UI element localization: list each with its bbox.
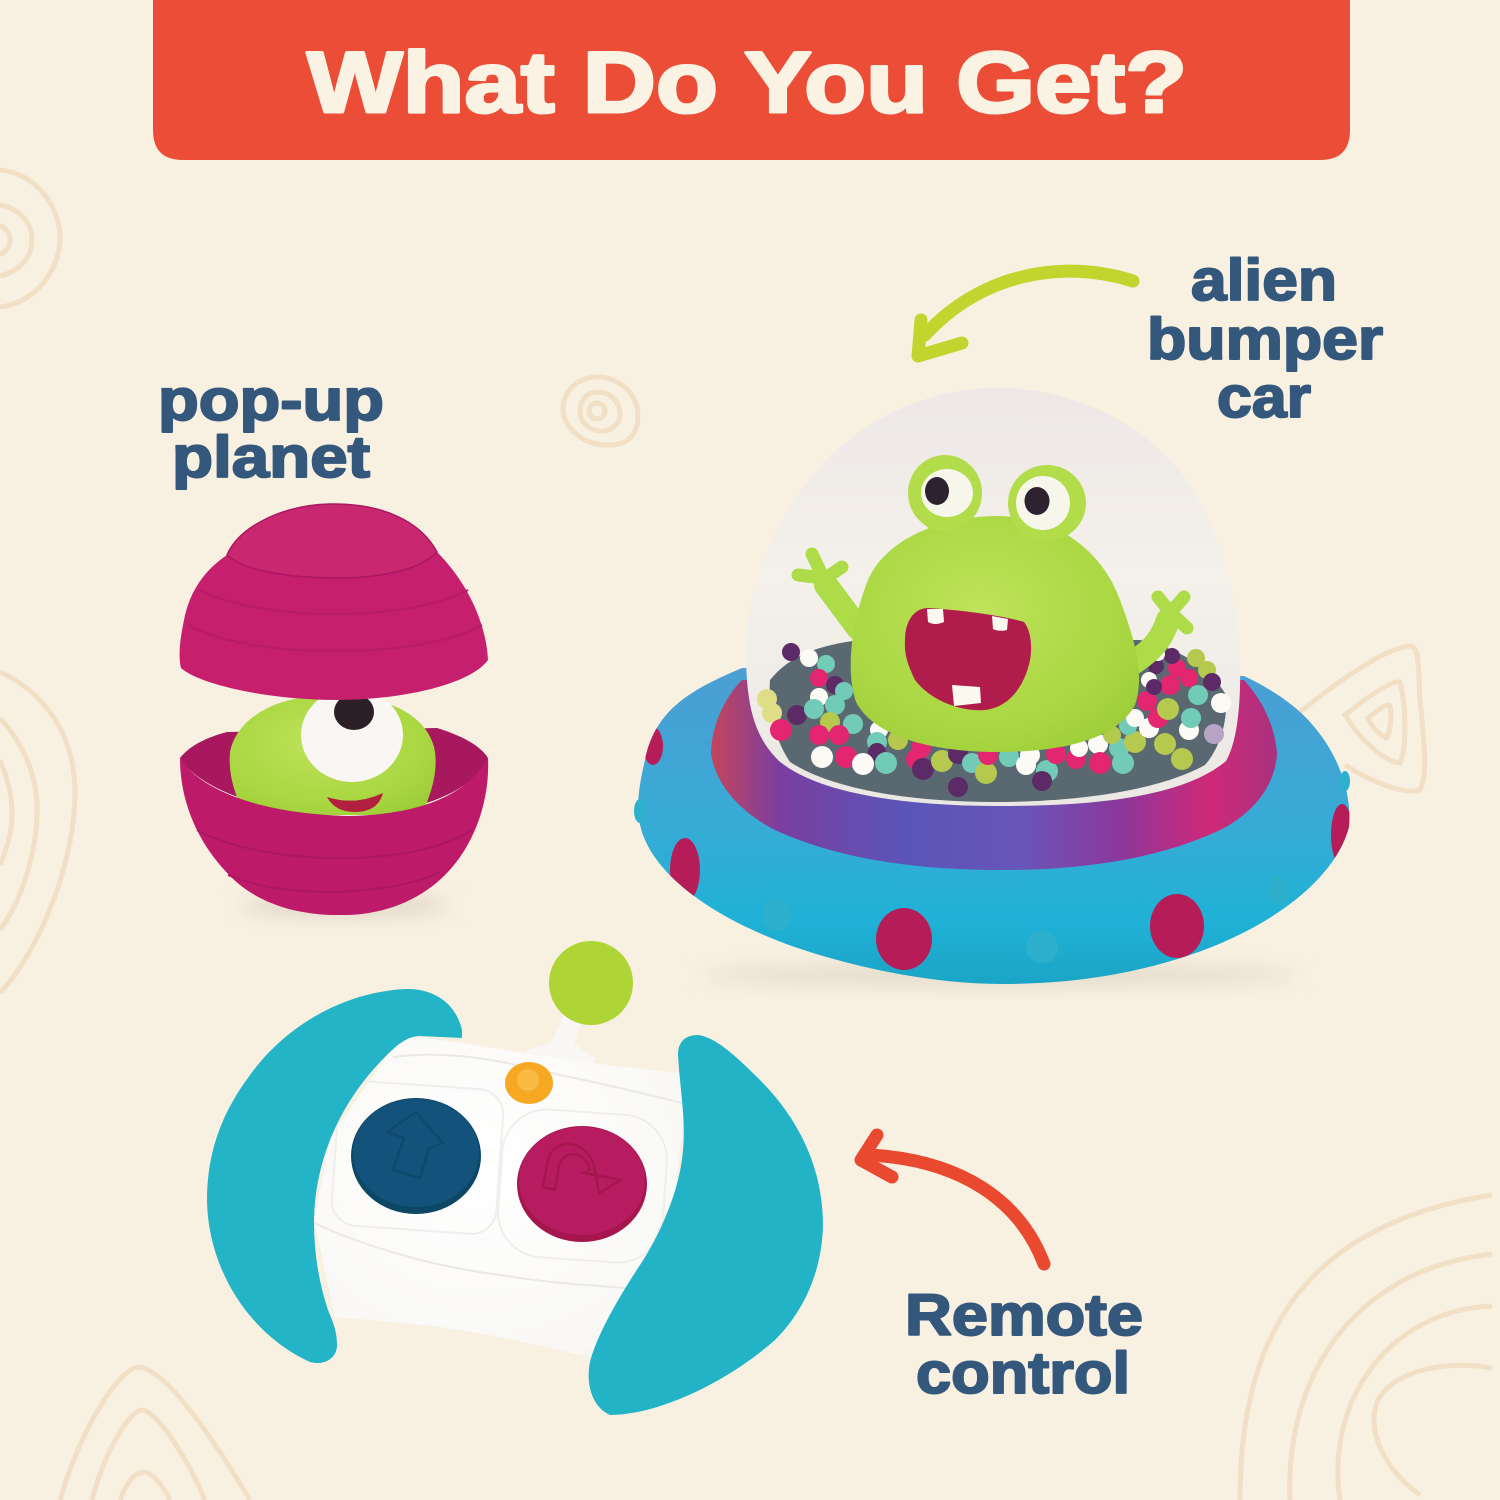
title: What Do You Get? xyxy=(307,35,1187,131)
ufo dark floor xyxy=(770,640,1226,802)
alien body xyxy=(851,516,1139,752)
navy up button xyxy=(351,1098,481,1214)
label: pop-up planet: pop-up xyxy=(158,368,384,433)
header banner xyxy=(153,0,1350,160)
planet shadow xyxy=(240,893,450,917)
alien xyxy=(798,455,1187,752)
planet cap top disc xyxy=(227,504,437,578)
toy: remote control xyxy=(207,941,823,1415)
planet alien eye xyxy=(301,688,403,782)
ufo purple ring xyxy=(711,680,1277,870)
planet green alien xyxy=(230,688,436,815)
toy: pop-up planet xyxy=(180,504,488,917)
remote white body xyxy=(314,1037,684,1358)
remote antenna xyxy=(526,941,633,1065)
planet bottom shell back xyxy=(180,728,488,815)
arrow: lime pointing to bumper car xyxy=(918,271,1133,356)
ufo teal bumps xyxy=(634,771,1350,963)
remote antenna ball xyxy=(549,941,633,1025)
remote left teal grip xyxy=(207,989,462,1363)
remote button frames xyxy=(330,1079,670,1266)
toy: alien bumper car xyxy=(634,388,1353,987)
label: alien bumper car xyxy=(1147,248,1383,430)
ufo base xyxy=(638,668,1349,984)
orange power button xyxy=(505,1062,553,1104)
alien left arm xyxy=(798,554,858,628)
label: Remote control: control xyxy=(916,1341,1130,1406)
planet top cap xyxy=(180,504,488,700)
beads xyxy=(757,643,1231,797)
label: alien bumper car: car xyxy=(1217,365,1311,430)
alien eye stalks xyxy=(925,520,1066,560)
alien mouth xyxy=(905,608,1031,710)
alien upper teeth xyxy=(927,609,1008,631)
label: Remote control: Remote xyxy=(905,1283,1143,1348)
ufo magenta spots xyxy=(643,727,1353,970)
dome xyxy=(746,388,1240,806)
label: Remote control xyxy=(905,1283,1143,1406)
label: alien bumper car: alien xyxy=(1191,248,1337,313)
planet bottom shell front xyxy=(180,758,488,915)
alien right arm xyxy=(1130,597,1187,665)
planet alien mouth xyxy=(327,793,383,812)
label: pop-up planet xyxy=(158,368,384,490)
alien right eye xyxy=(1008,465,1086,541)
label: pop-up planet: planet xyxy=(172,425,370,490)
label: alien bumper car: bumper xyxy=(1147,307,1383,372)
arrow: red pointing to remote xyxy=(861,1135,1044,1264)
planet alien pupil xyxy=(334,694,374,730)
alien lower tooth xyxy=(952,685,981,706)
alien left eye xyxy=(908,455,982,531)
ufo shadow xyxy=(700,963,1300,987)
magenta turn button xyxy=(517,1126,647,1242)
remote right teal grip xyxy=(589,1035,823,1415)
